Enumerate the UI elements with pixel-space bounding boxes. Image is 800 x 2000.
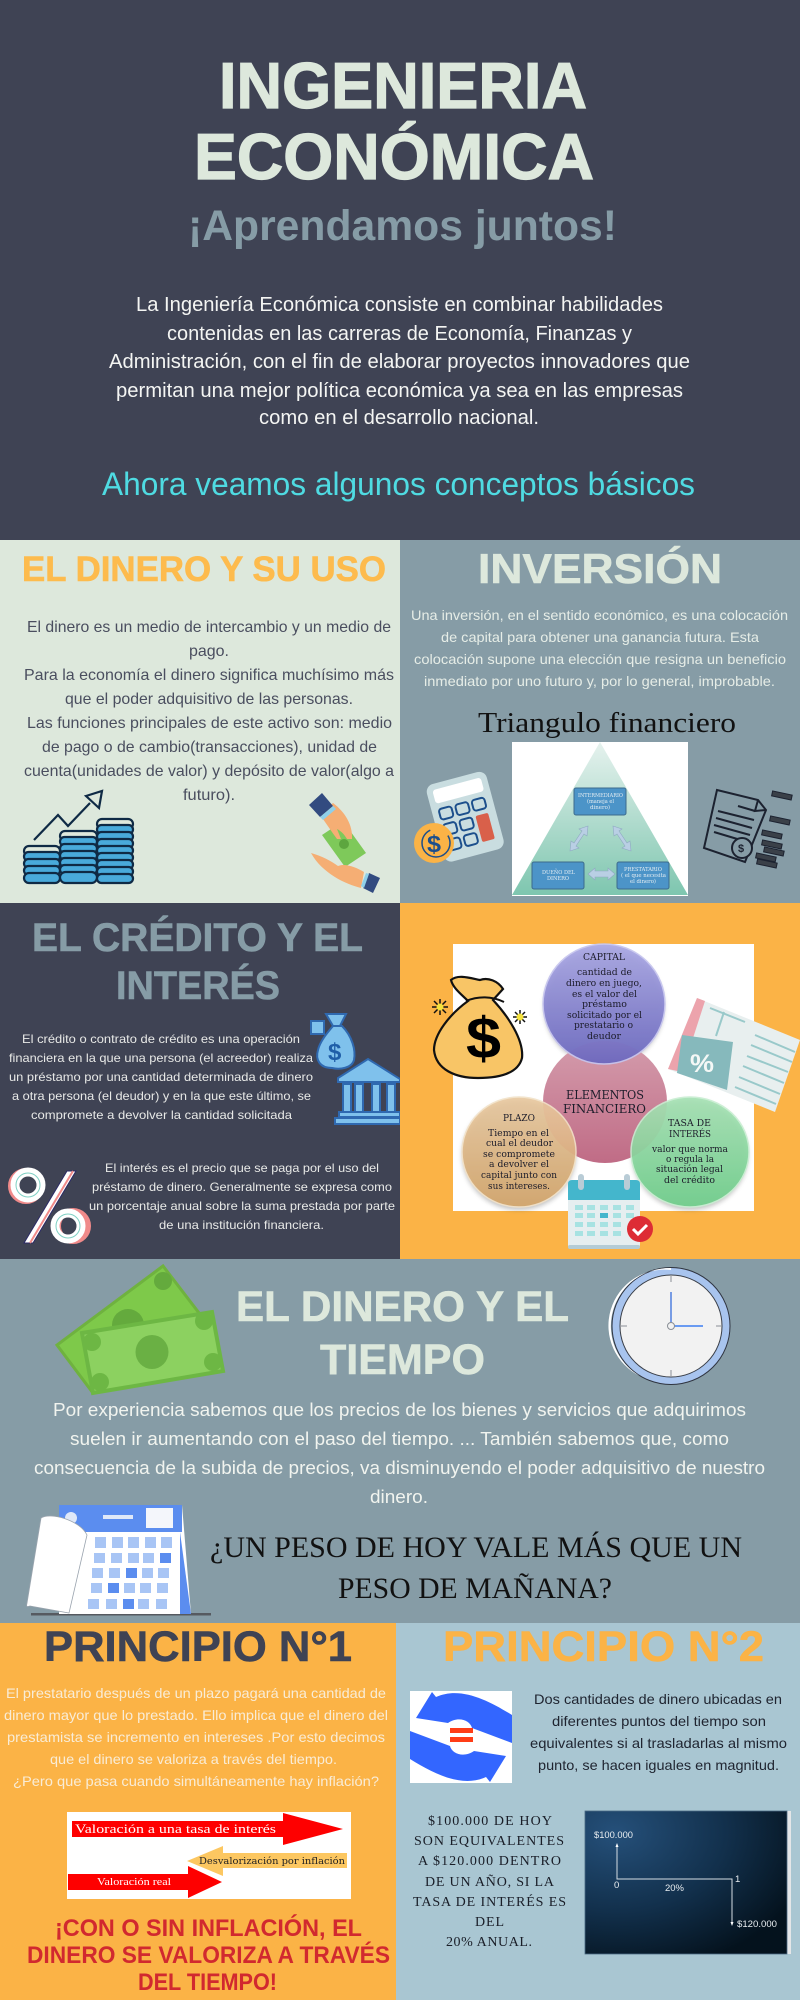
conclusion text: ¡CON O SIN INFLACIÓN, EL: [55, 1914, 362, 1942]
example text: $100.000 DE HOY: [428, 1814, 552, 1829]
panel: el crédito y el interés: [0, 903, 400, 1259]
tasa text: valor que norma: [651, 1144, 728, 1155]
body text: Dos cantidades de dinero ubicadas en: [534, 1691, 782, 1707]
text: interest definition: de una institución financiera.: [159, 1218, 324, 1232]
icon: banknotes: [57, 1266, 223, 1393]
body text: de capital para obtener una ganancia futura. Esta: [441, 629, 759, 645]
heading: EL DINERO Y EL: [236, 1283, 569, 1331]
capital text: préstamo: [582, 999, 627, 1010]
panel: el dinero y el tiempo: [0, 1259, 800, 1623]
capital text: CAPITAL: [583, 952, 626, 963]
intro text: [109, 294, 690, 429]
chart: cash flow timeline: $120.000: [737, 1919, 777, 1930]
tasa text: [651, 1118, 728, 1186]
icon: yellow money bag: $: [466, 1006, 501, 1071]
diagram: financial triangle: INTERMEDIARIO: [578, 793, 623, 799]
conclusion text: DINERO SE VALORIZA A TRAVÉS: [27, 1941, 390, 1969]
body text: Las funciones principales de este activo son: medio: [27, 715, 392, 732]
plazo text: PLAZO: [503, 1113, 535, 1124]
heading: INTERÉS: [116, 963, 280, 1008]
icon: bank: [335, 1059, 400, 1124]
subheading: Triangulo financiero: [478, 707, 736, 739]
intro text: Administración, con el fin de elaborar proyectos innovadores que: [109, 351, 690, 373]
title: ECONÓMICA: [194, 120, 594, 193]
capital text: es el valor del: [572, 989, 637, 1000]
icon: hands exchanging money: [309, 793, 380, 893]
example text: [413, 1814, 566, 1950]
diagram: financial triangle: DUEÑO DEL: [542, 868, 575, 876]
text: interest definition: [89, 1161, 395, 1232]
heading: PRINCIPIO N°1: [44, 1623, 352, 1671]
body text: El prestatario después de un plazo pagará una cantidad de: [6, 1685, 386, 1701]
panel: principio 1: [0, 1623, 396, 2000]
plazo text: a devolver el: [489, 1159, 549, 1170]
icon: calculator with coin: [414, 770, 506, 863]
example text: A $120.000 DENTRO: [418, 1854, 561, 1869]
body text: Para la economía el dinero significa muchísimo más: [24, 667, 394, 684]
text: credit definition: El crédito o contrato de crédito es una operación: [22, 1032, 300, 1046]
icon: document with coin: [704, 790, 792, 868]
diagram: valuation arrows: Valoración a una tasa de interés: [75, 1821, 276, 1836]
capital text: solicitado por el: [567, 1010, 642, 1021]
body text: consecuencia de la subida de precios, va disminuyendo el poder adquisitivo de nuestro: [34, 1457, 765, 1478]
diagram: financial triangle: [512, 742, 688, 896]
body text: ¿Pero que pasa cuando simultáneamente hay inflación?: [13, 1773, 379, 1789]
question callout: [210, 1531, 742, 1605]
chart: cash flow timeline: [585, 1811, 791, 1954]
plazo text: Tiempo en el: [488, 1128, 549, 1139]
conclusion text: [27, 1914, 390, 1996]
call to action: Ahora veamos algunos conceptos básicos: [102, 466, 695, 502]
heading: EL CRÉDITO Y EL: [32, 915, 363, 960]
capital text: deudor: [587, 1031, 621, 1042]
icon: calendar with check: [568, 1174, 653, 1249]
body text: [530, 1691, 787, 1773]
tasa text: situación legal: [656, 1164, 723, 1175]
example text: SON EQUIVALENTES: [414, 1834, 564, 1849]
text: interest definition: préstamo de dinero. Generalmente se expresa como: [92, 1180, 392, 1194]
icon: blue money bag: $: [328, 1039, 342, 1066]
tasa text: o regula la: [666, 1154, 714, 1165]
body text: equivalentes si al trasladarlas al mismo: [530, 1735, 787, 1751]
text: credit definition: a otra persona (el deudor) y en la que este último, se: [12, 1089, 311, 1103]
diagram: valuation arrows: Valoración real: [97, 1876, 171, 1888]
center text: [563, 1087, 646, 1116]
icon: blue money bag: [311, 1014, 354, 1069]
body text: que el dinero se valoriza a través del tiempo.: [50, 1751, 337, 1767]
diagram: valuation arrows: [67, 1812, 351, 1899]
plazo text: [481, 1113, 557, 1192]
body text: dinero.: [370, 1486, 428, 1507]
panel: elementos financieros: [400, 903, 800, 1259]
diagram: financial triangle: PRESTATARIO: [624, 867, 662, 873]
example text: DE UN AÑO, SI LA: [425, 1874, 555, 1890]
body text: suelen ir aumentando con el paso del tiempo. ... También sabemos que, como: [70, 1428, 729, 1449]
panel: header: [0, 0, 800, 540]
diagram: financial triangle: dinero): [590, 804, 610, 811]
intro text: La Ingeniería Económica consiste en combinar habilidades: [136, 294, 663, 316]
center text: ELEMENTOS: [566, 1087, 644, 1102]
text: credit definition: [9, 1032, 313, 1122]
icon: document with coin: $: [738, 843, 744, 855]
body text: inmediato por uno futuro y, por lo general, improbable.: [424, 673, 775, 689]
body text: punto, se hacen iguales en magnitud.: [538, 1757, 779, 1773]
plazo text: sus intereses.: [488, 1181, 550, 1192]
body text: pago.: [189, 643, 229, 660]
icon: yellow money bag: [432, 977, 527, 1078]
intro text: permitan una mejor política económica ya sea en las empresas: [116, 380, 683, 402]
body text: Una inversión, en el sentido económico, es una colocación: [411, 607, 788, 623]
heading: [236, 1283, 569, 1384]
heading: [32, 915, 363, 1008]
body text: colocación supone una elección que resigna un beneficio: [414, 651, 786, 667]
diagram: valuation arrows: Desvalorización por inflación: [199, 1856, 345, 1867]
chart: cash flow timeline: $100.000: [594, 1830, 633, 1841]
title: [194, 49, 594, 193]
tasa text: del crédito: [664, 1175, 715, 1186]
text: credit definition: compromete a devolver la cantidad solicitada: [31, 1108, 292, 1122]
body text: futuro).: [183, 787, 235, 804]
capital text: cantidad de: [577, 967, 632, 978]
capital text: prestatario o: [574, 1020, 633, 1031]
image: tax forms with percent: %: [690, 1050, 714, 1078]
panel: principio 2: [396, 1623, 800, 2000]
heading: EL DINERO Y SU USO: [22, 550, 386, 589]
tasa text: TASA DE: [668, 1118, 711, 1129]
icon: wall calendar: [27, 1505, 211, 1616]
icon: percent sign: [11, 1171, 88, 1243]
plazo text: se compromete: [483, 1149, 555, 1160]
title: INGENIERIA: [219, 49, 587, 122]
center text: FINANCIERO: [563, 1101, 646, 1116]
body text: cuenta(unidades de valor) y depósito de valor(algo a: [24, 763, 394, 780]
body text: diferentes puntos del tiempo son: [552, 1713, 766, 1729]
intro text: contenidas en las carreras de Economía, Finanzas y: [167, 323, 632, 345]
example text: 20% ANUAL.: [446, 1935, 532, 1950]
subtitle: ¡Aprendamos juntos!: [188, 202, 617, 250]
diagram: financial triangle: DINERO: [547, 876, 569, 882]
icon: equivalence arrows: [410, 1691, 512, 1783]
plazo text: capital junto con: [481, 1170, 557, 1181]
diagram: financial triangle: ( el que necesita: [621, 872, 667, 879]
body text: [24, 619, 394, 804]
image: tax forms with percent: [668, 998, 800, 1112]
text: credit definition: un préstamo por una cantidad determinada de dinero: [9, 1070, 313, 1084]
heading: TIEMPO: [320, 1336, 485, 1384]
body text: dinero mayor que lo prestado. Ello implica que el dinero del: [4, 1707, 388, 1723]
chart: cash flow timeline: 20%: [665, 1883, 685, 1894]
icon: clock: [608, 1268, 730, 1384]
body text: [411, 607, 788, 689]
icon: calculator with coin: $: [427, 831, 442, 858]
text: interest definition: un porcentaje anual sobre la suma prestada por parte: [89, 1199, 395, 1213]
question callout: PESO DE MAÑANA?: [338, 1572, 612, 1605]
example text: TASA DE INTERÉS ES: [413, 1893, 566, 1910]
text: interest definition: El interés es el precio que se paga por el uso del: [105, 1161, 379, 1175]
body text: Por experiencia sabemos que los precios de los bienes y servicios que adquirimos: [53, 1399, 746, 1420]
heading: PRINCIPIO N°2: [443, 1623, 764, 1671]
chart: cash flow timeline: 1: [735, 1874, 740, 1885]
body text: [4, 1685, 388, 1789]
diagram: financial elements circles: [462, 944, 749, 1210]
heading: INVERSIÓN: [478, 544, 722, 592]
chart: cash flow timeline: 0: [614, 1880, 619, 1891]
icon: coin stacks with rising arrow: [24, 791, 133, 883]
question callout: ¿UN PESO DE HOY VALE MÁS QUE UN: [210, 1531, 742, 1564]
intro text: como en el desarrollo nacional.: [259, 407, 539, 429]
diagram: financial triangle: (maneja el: [587, 798, 614, 805]
conclusion text: DEL TIEMPO!: [138, 1969, 277, 1996]
capital text: dinero en juego,: [566, 978, 642, 989]
body text: de pago o de cambio(transacciones), unidad de: [42, 739, 377, 756]
plazo text: cual el deudor: [486, 1138, 553, 1149]
panel: el dinero y su uso: [0, 540, 400, 903]
panel: inversión: [400, 540, 800, 903]
capital text: [566, 952, 642, 1042]
example text: DEL: [475, 1915, 504, 1930]
body text: [34, 1399, 765, 1507]
body text: prestamista se incremento en intereses .Por esto decimos: [7, 1729, 385, 1745]
tasa text: INTERÉS: [669, 1128, 711, 1140]
text: credit definition: financiera en la que una persona (el acreedor) realiza: [9, 1051, 313, 1065]
body text: que el poder adquisitivo de las personas.: [65, 691, 353, 708]
body text: El dinero es un medio de intercambio y un medio de: [27, 619, 391, 636]
diagram: financial triangle: el dinero): [630, 878, 656, 885]
